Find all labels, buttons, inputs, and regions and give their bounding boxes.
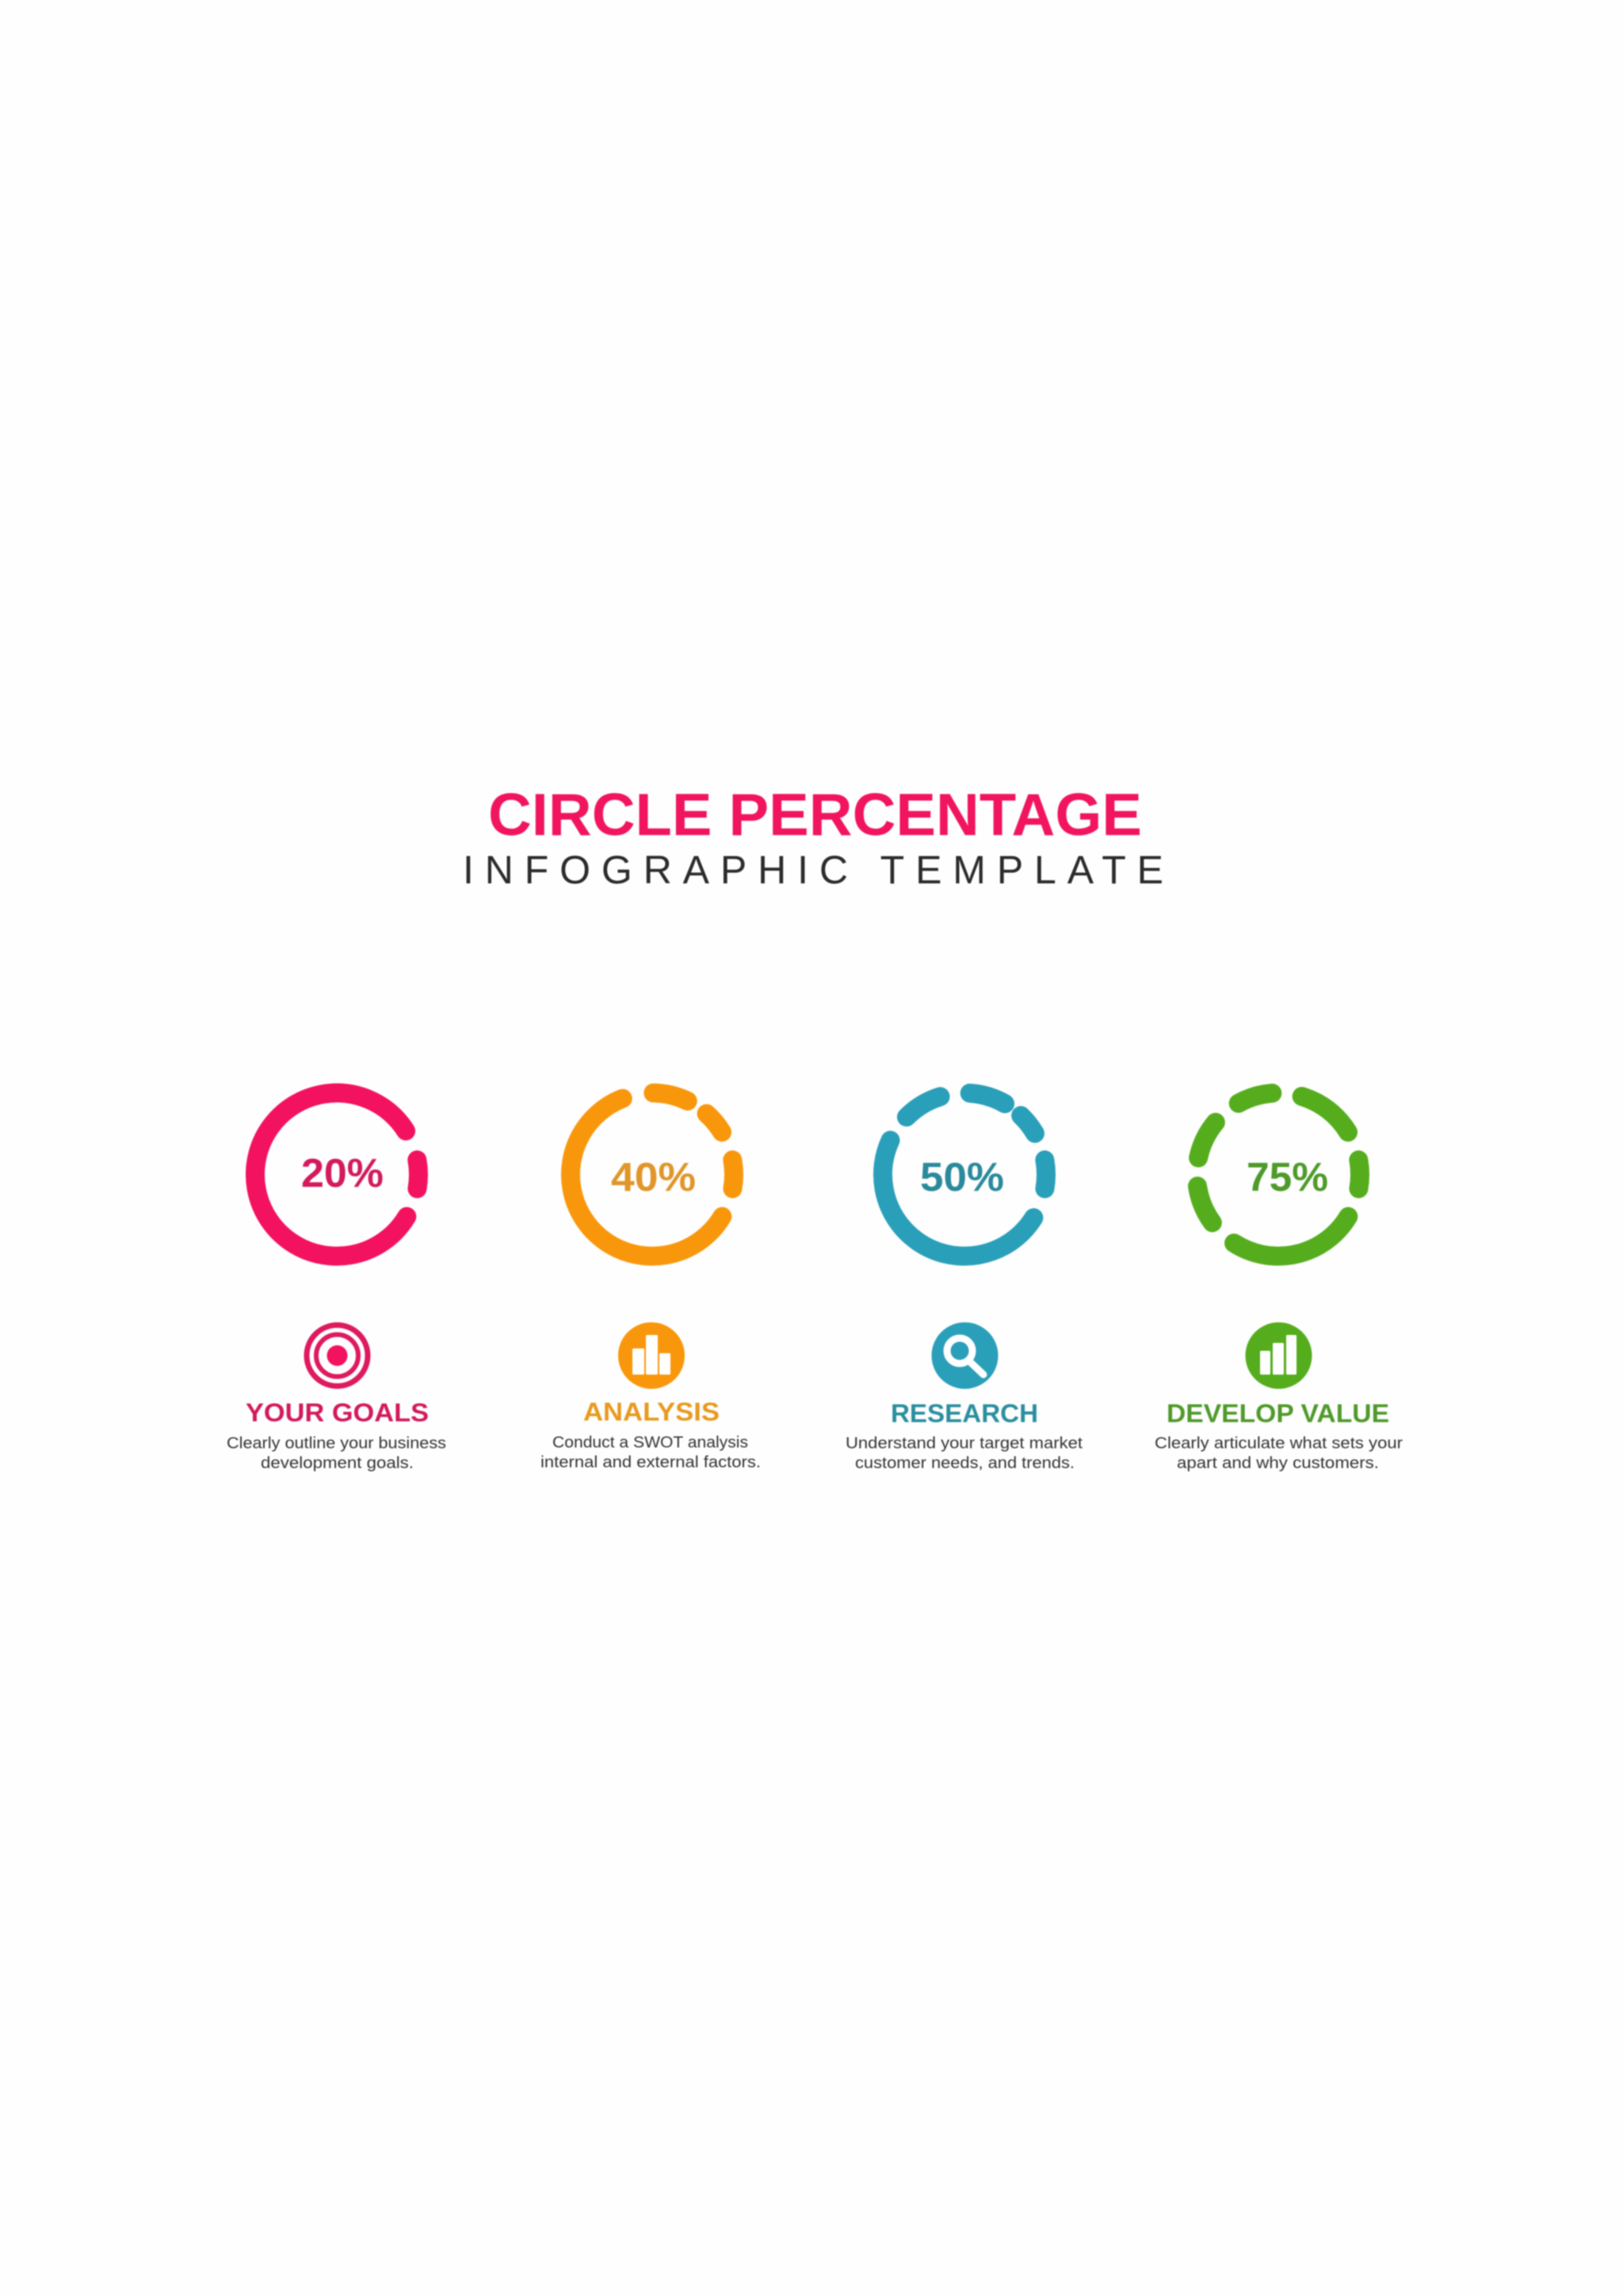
heading: develop value: DEVELOP VALUE xyxy=(1167,1399,1389,1428)
subtitle: INFOGRAPHIC TEMPLATE xyxy=(463,848,1163,892)
description: analysis: internal and external factors. xyxy=(540,1454,761,1471)
value: 40%: 40% xyxy=(611,1154,696,1199)
description: your goals: development goals. xyxy=(261,1455,414,1472)
icon: magnifier xyxy=(932,1322,999,1389)
panel: develop value xyxy=(1155,1080,1403,1472)
panel: research xyxy=(846,1080,1083,1472)
heading: analysis: ANALYSIS xyxy=(583,1398,720,1426)
description: develop value xyxy=(1155,1435,1403,1472)
panel: your goals xyxy=(227,1080,446,1472)
description: research: customer needs, and trends. xyxy=(855,1455,1075,1472)
description: your goals: Clearly outline your business xyxy=(227,1435,446,1452)
heading: your goals: YOUR GOALS xyxy=(246,1398,429,1427)
description: research: Understand your target market xyxy=(846,1435,1083,1452)
icon: target xyxy=(307,1325,368,1386)
panel: analysis xyxy=(540,1080,761,1471)
title: CIRCLE PERCENTAGE xyxy=(488,781,1142,848)
description: your goals xyxy=(227,1435,446,1472)
heading: research: RESEARCH xyxy=(891,1399,1038,1428)
description: analysis xyxy=(540,1434,761,1471)
description: develop value: Clearly articulate what sets your xyxy=(1155,1435,1403,1452)
value: 20%: 20% xyxy=(301,1150,384,1196)
ring chart: 75% xyxy=(1184,1080,1373,1269)
ring chart: 20% xyxy=(242,1080,431,1269)
ring chart: 40% xyxy=(558,1080,747,1269)
description: research xyxy=(846,1435,1083,1472)
icon: bar chart xyxy=(618,1322,685,1389)
description: analysis: Conduct a SWOT analysis xyxy=(552,1434,748,1451)
icon: rising bars xyxy=(1246,1322,1312,1389)
ring chart: 50% xyxy=(870,1080,1059,1269)
value: 50%: 50% xyxy=(920,1154,1004,1199)
description: develop value: apart and why customers. xyxy=(1177,1455,1379,1472)
value: 75%: 75% xyxy=(1247,1154,1328,1199)
